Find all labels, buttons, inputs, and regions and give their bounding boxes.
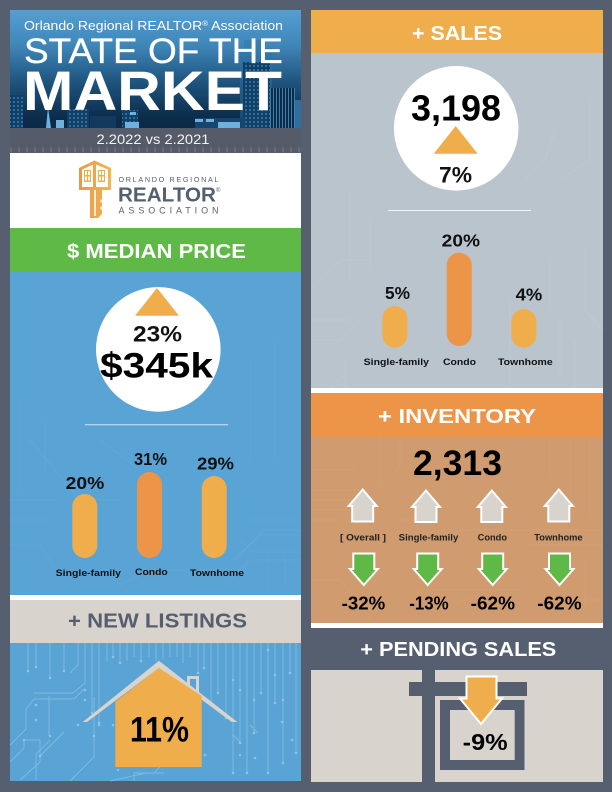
panel: sales: [311, 53, 603, 388]
icon: hanging sign: [409, 682, 527, 770]
callout: price circle: [96, 287, 221, 412]
bar chart: sales by type: [364, 231, 553, 367]
bar chart: median price by type: Townhome: [190, 568, 244, 578]
percentages: [342, 593, 582, 613]
lake reflection: [10, 148, 301, 152]
icon: house: 11%: [130, 711, 189, 750]
percentages: -13%: [409, 593, 449, 613]
callout: sales circle: 7%: [439, 163, 472, 188]
bar chart: median price by type: [56, 449, 244, 578]
heading: sales: + SALES: [412, 23, 502, 45]
heading: median price: $ MEDIAN PRICE: [67, 241, 246, 263]
header kicker: Orlando Regional REALTOR: [24, 19, 183, 33]
circuit pattern: [311, 100, 603, 388]
percentages: -62%: [471, 593, 515, 613]
percentages: -62%: [537, 593, 582, 613]
category labels: Condo: [478, 533, 508, 543]
category labels: [340, 533, 583, 543]
total: 2,313: [413, 444, 502, 483]
heading: new listings: + NEW LISTINGS: [68, 610, 247, 632]
title: state of the: STATE OF THE: [24, 32, 283, 71]
header kicker: Association: [208, 19, 283, 33]
bar chart: median price by type: 31%: [134, 449, 167, 469]
panel: inventory: [311, 437, 603, 623]
logo text: REALTOR: [118, 184, 217, 206]
panel: pending sales: [311, 670, 603, 782]
callout: price circle: $345k: [100, 347, 214, 386]
circuit pattern: [10, 340, 301, 590]
bar chart: median price by type: 20%: [66, 473, 105, 493]
bar chart: median price by type: 29%: [197, 454, 234, 474]
icon: house: [83, 661, 237, 767]
logo text: ORLANDO REGIONAL: [118, 175, 218, 184]
logo text: [118, 175, 221, 216]
up house arrows: [349, 490, 573, 522]
heading: new listings: [10, 600, 301, 643]
bar chart: sales by type: Condo: [443, 357, 476, 367]
category labels: Single-family: [399, 533, 458, 543]
circuit dots: [24, 650, 296, 773]
logo text: ®: [216, 187, 221, 194]
down arrows: [350, 554, 574, 585]
logo text: ASSOCIATION: [118, 206, 218, 216]
category labels: Townhome: [534, 533, 583, 543]
heading: sales: [311, 10, 603, 53]
bar chart: sales by type: 20%: [442, 231, 480, 251]
callout: sales circle: 3,198: [411, 88, 501, 129]
icon: house key: [79, 160, 111, 218]
heading: pending sales: + PENDING SALES: [360, 639, 556, 661]
bar chart: sales by type: 4%: [516, 285, 543, 305]
callout: price circle: 23%: [133, 322, 182, 347]
circuit lines: [10, 643, 296, 781]
panel: new listings: [10, 643, 301, 781]
panel: header: [10, 10, 301, 153]
percentages: -32%: [342, 593, 385, 613]
panel: logo: [10, 153, 301, 228]
circuit pattern: [311, 437, 603, 620]
icon: down arrow: [460, 676, 502, 724]
title: market: MARKET: [23, 59, 282, 122]
heading: median price: [10, 228, 301, 272]
bar chart: median price by type: Condo: [135, 567, 168, 577]
value: -9%: [463, 729, 508, 755]
heading: inventory: [311, 393, 603, 437]
bar chart: median price by type: Single-family: [56, 568, 122, 578]
panel: median price: [10, 272, 301, 595]
category labels: [ Overall ]: [340, 533, 386, 543]
bar chart: sales by type: Single-family: [364, 357, 430, 367]
bar chart: sales by type: 5%: [385, 283, 410, 303]
callout: sales circle: [394, 66, 518, 191]
skyline: [10, 40, 301, 153]
heading: inventory: + INVENTORY: [378, 406, 537, 428]
header kicker: ®: [202, 20, 209, 28]
date range: 2.2022 vs 2.2021: [96, 131, 210, 147]
bar chart: sales by type: Townhome: [498, 357, 553, 367]
